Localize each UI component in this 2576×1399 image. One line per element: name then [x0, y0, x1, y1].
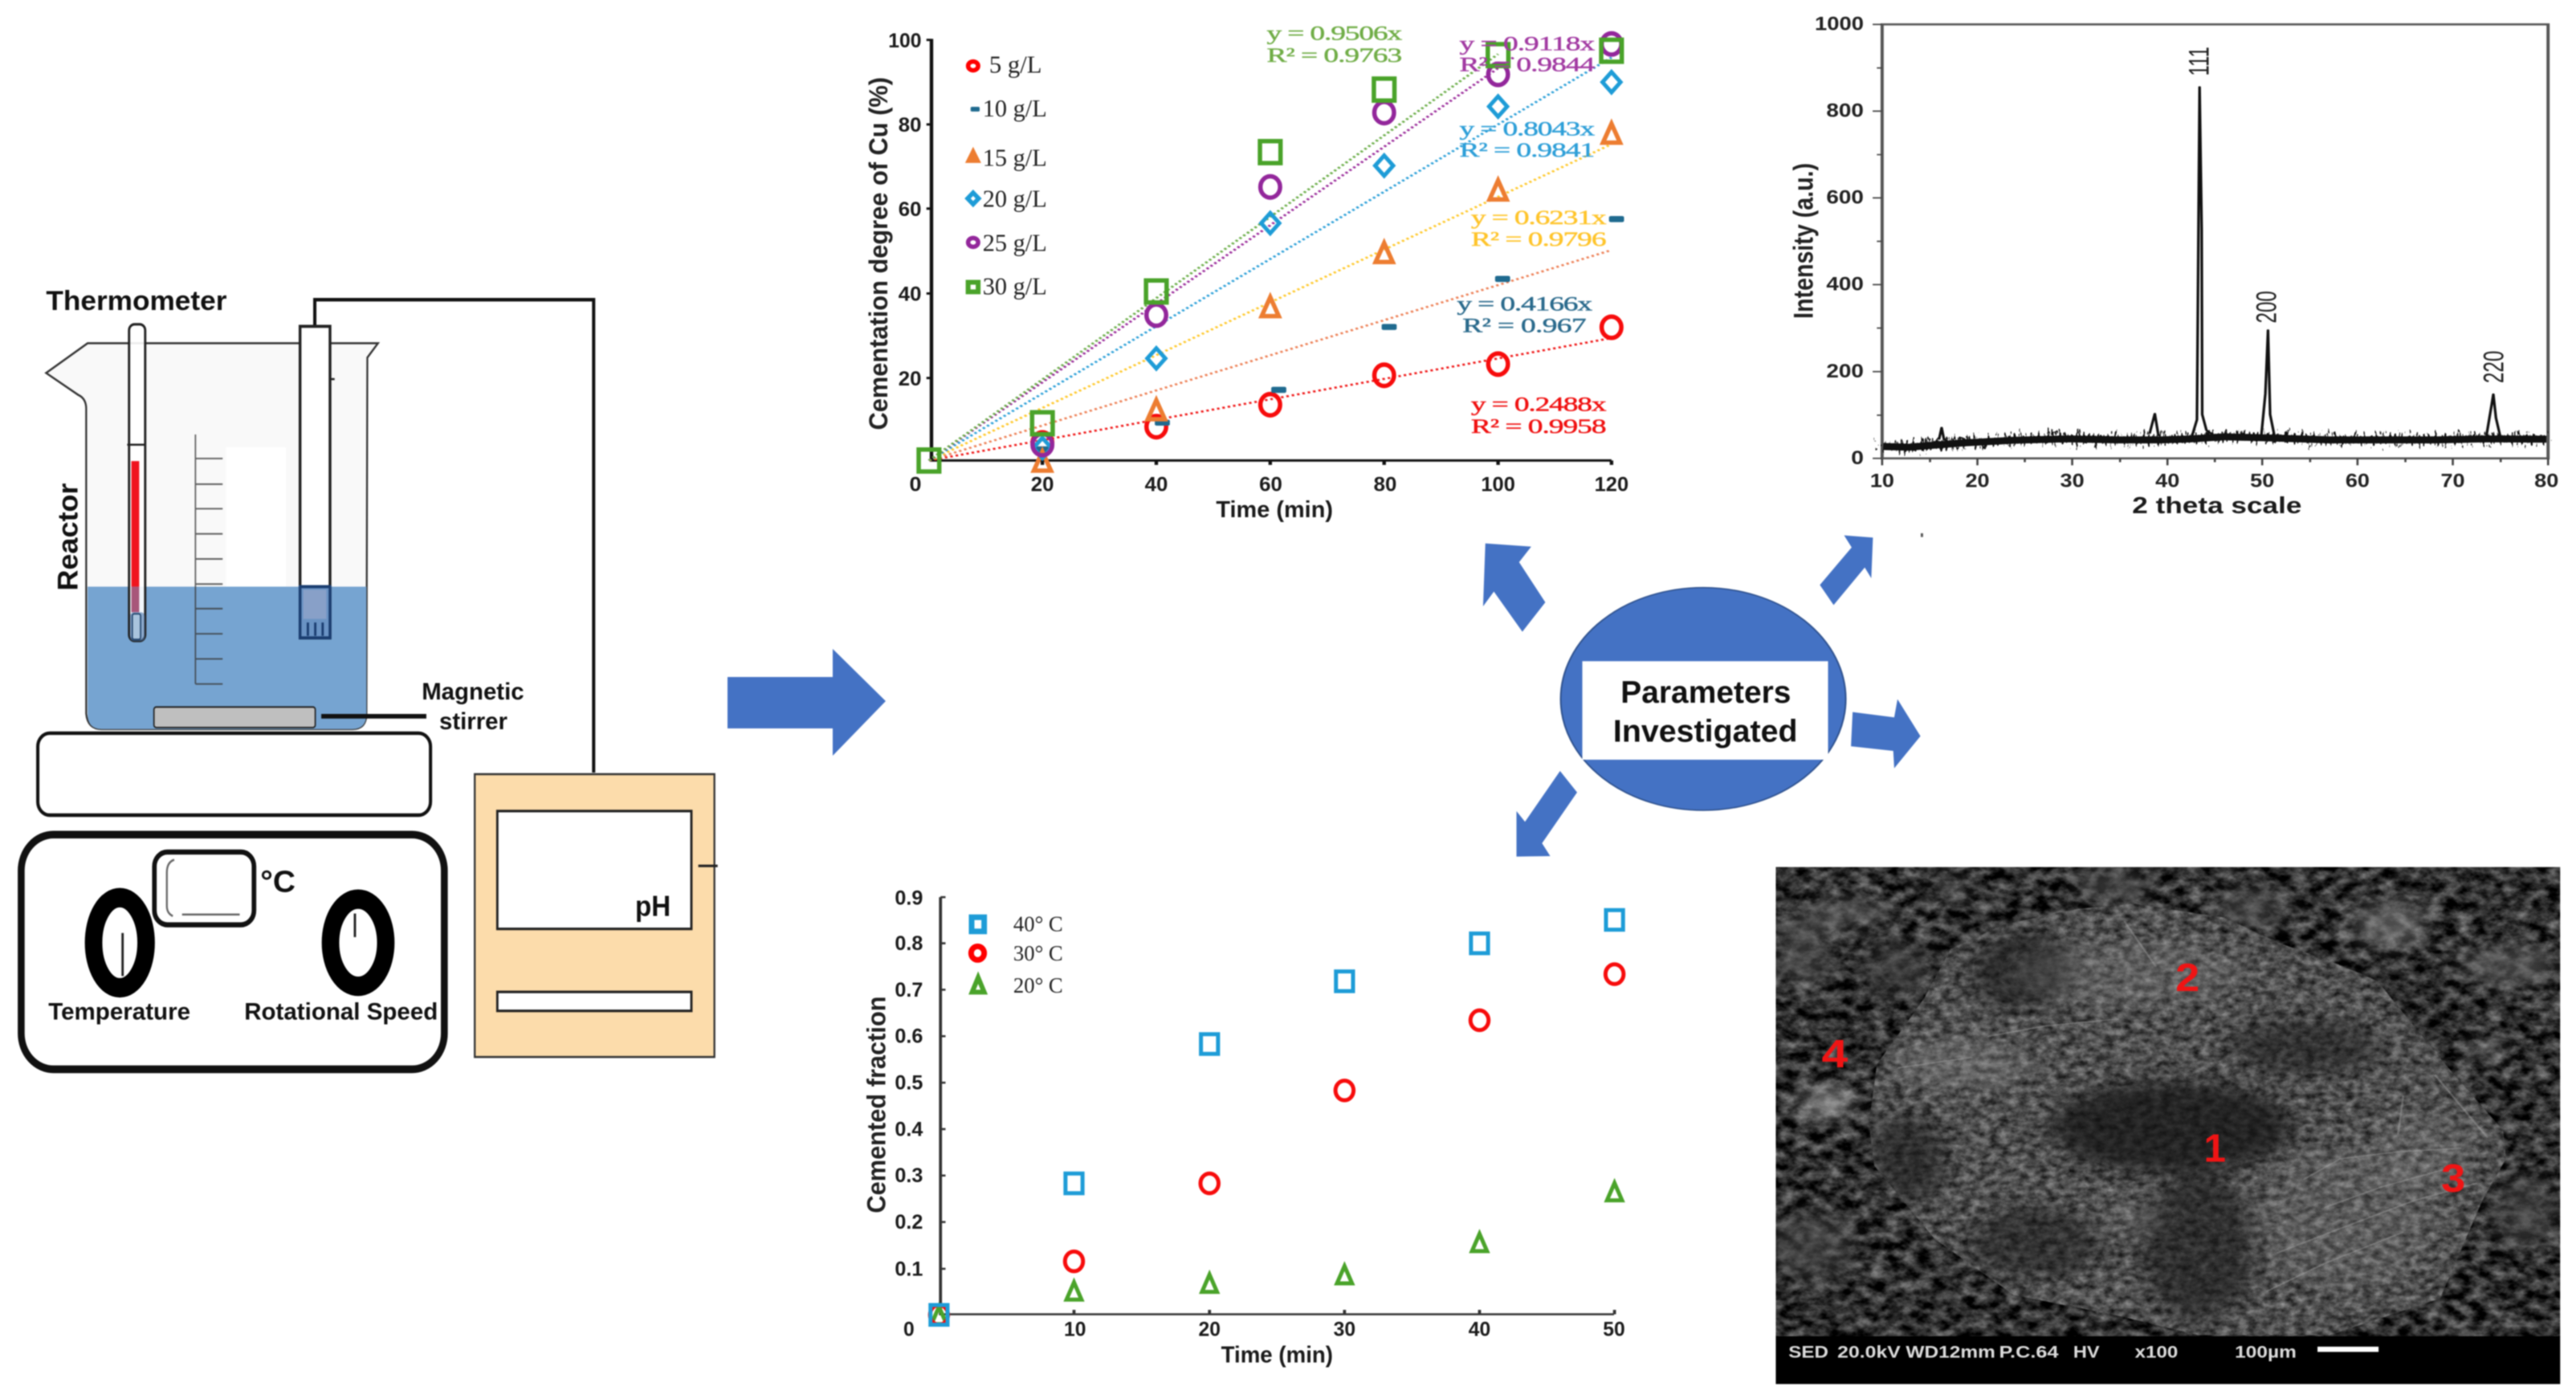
peak label 200: 200 [2252, 291, 2283, 323]
equation: 10 g/L: y = 0.4166x [1457, 292, 1592, 315]
equation: 30 g/L: R² = 0.9763 [1267, 44, 1402, 67]
panel: SEM micrograph [1771, 867, 2560, 1384]
x axis labels: 0 [909, 472, 921, 496]
y axis labels: 60 [899, 198, 921, 221]
x axis labels: 60 [1259, 472, 1282, 496]
series: 30 g/L [919, 39, 1622, 471]
peak label 111: 111 [2184, 47, 2215, 76]
legend: 15 g/L [983, 144, 1047, 171]
hot plate top [38, 733, 430, 815]
series: 20 g/L [1033, 72, 1620, 458]
x axis labels: 70 [2440, 469, 2465, 491]
hot plate control base [21, 834, 444, 1069]
arrow: to SEM image [1851, 700, 1921, 769]
x axis labels: 10 [1870, 469, 1894, 491]
hub label: Parameters [1620, 675, 1791, 710]
x axis labels: 80 [2534, 469, 2558, 491]
x axis title: Time (min) [1221, 1341, 1333, 1368]
SEM info bar [1775, 1336, 2560, 1384]
y axis labels: 0 [1851, 447, 1864, 469]
equation: 30 g/L: y = 0.9506x [1267, 22, 1402, 44]
y axis labels: 0.7 [895, 978, 923, 1001]
x axis labels: 30 [1334, 1318, 1355, 1340]
arrow: to XRD chart [1820, 536, 1873, 605]
x axis labels: 50 [1603, 1318, 1625, 1340]
hub label [1583, 661, 1828, 760]
x axis labels: 60 [2346, 469, 2370, 491]
y axis labels: 0.3 [895, 1164, 923, 1187]
equation: 25 g/L [1460, 32, 1595, 75]
x axis labels [903, 1318, 1625, 1340]
SEM info bar: 100µm [2235, 1343, 2297, 1361]
x axis labels: 20 [1031, 472, 1054, 496]
y axis labels: 600 [1826, 186, 1864, 208]
equation: 10 g/L: R² = 0.967 [1462, 314, 1587, 336]
equation: 5 g/L: R² = 0.9958 [1471, 415, 1607, 437]
legend: 10 g/L [983, 95, 1047, 122]
temperature display [154, 852, 254, 925]
y axis labels: 200 [1826, 360, 1864, 382]
legend: 25 g/L [983, 229, 1047, 256]
series: 20 C [931, 1183, 1622, 1324]
SEM info bar: 20.0kV [1837, 1343, 1901, 1361]
unit label: °C [260, 864, 296, 899]
legend: 40° C [1013, 912, 1063, 936]
series: 40 C [931, 910, 1623, 1325]
equation: 15 g/L: y = 0.6231x [1471, 206, 1607, 229]
hub circle [1561, 588, 1846, 810]
equation: 20 g/L: R² = 0.9841 [1460, 139, 1595, 161]
region labels: 2 [2175, 956, 2199, 1000]
x axis labels: 20 [1965, 469, 1990, 491]
temperature knob [94, 898, 146, 988]
y axis labels: 0.2 [895, 1210, 923, 1234]
series: 30 C [930, 965, 1624, 1325]
x axis labels: 80 [1374, 472, 1396, 496]
central hub and arrows [1483, 533, 1923, 857]
x axis labels [909, 472, 1628, 496]
magnetic stirrer bar [154, 707, 426, 728]
x axis labels: 30 [2060, 469, 2085, 491]
y axis labels: 0.1 [895, 1257, 923, 1280]
equation: 5 g/L: y = 0.2488x [1471, 393, 1607, 415]
SEM info bar: x100 [2135, 1343, 2178, 1361]
equation: 15 g/L [1471, 206, 1607, 251]
SEM info bar: HV [2073, 1343, 2100, 1361]
equation: 25 g/L: R² = 0.9844 [1460, 53, 1595, 75]
x axis title: Time (min) [1216, 496, 1333, 522]
region labels: 1 [2203, 1127, 2226, 1170]
y axis labels: 800 [1826, 100, 1864, 121]
pH meter [475, 774, 718, 1057]
y axis labels: 0.6 [895, 1025, 923, 1047]
legend: 20° C [1013, 973, 1063, 998]
arrow: to cementation chart [1483, 544, 1545, 632]
region labels [1822, 956, 2465, 1201]
equation: 5 g/L [1471, 393, 1607, 437]
rotational speed knob [331, 899, 385, 986]
equation: 10 g/L [1457, 292, 1592, 336]
label: pH: pH [635, 891, 670, 923]
x axis labels: 40 [1469, 1318, 1490, 1340]
x axis labels: 40 [1145, 472, 1168, 496]
x axis title: 2 theta scale [2132, 492, 2301, 518]
chart: cemented fraction versus time [862, 886, 1625, 1368]
y axis labels [888, 29, 922, 390]
peak label 220: 220 [2479, 351, 2510, 383]
y axis title: Cementation degree of Cu (%) [864, 77, 893, 430]
equation: 20 g/L: y = 0.8043x [1460, 117, 1595, 140]
y axis labels [895, 886, 923, 1280]
diffraction baseline noise [1883, 436, 2546, 447]
x axis labels: 120 [1595, 472, 1628, 496]
arrow: to temperature chart [1517, 771, 1577, 857]
legend: 20 g/L [983, 185, 1047, 213]
y axis title: Cemented fraction [862, 996, 891, 1213]
series: 15 g/L [1034, 124, 1620, 471]
x axis labels [1870, 469, 2558, 491]
y axis labels: 0.8 [895, 932, 923, 955]
series: 25 g/L [1033, 33, 1621, 455]
label: rotational speed: Rotational Speed [244, 998, 438, 1025]
region labels: 4 [1822, 1033, 1848, 1076]
y axis labels: 0.5 [895, 1071, 923, 1094]
series: 10 g/L [1036, 216, 1624, 452]
label: magnetic stirrer: Magnetic [422, 679, 524, 704]
y axis labels: 40 [899, 283, 921, 305]
equation: 20 g/L [1460, 117, 1595, 161]
legend: 5 g/L [989, 51, 1042, 79]
legend: 30 g/L [983, 272, 1047, 300]
copper particle [1856, 900, 2519, 1337]
label: temperature: Temperature [48, 998, 190, 1025]
label: magnetic stirrer: stirrer [439, 708, 507, 734]
label: reactor: Reactor [51, 483, 84, 591]
label: magnetic stirrer [422, 679, 524, 734]
thermometer [127, 324, 145, 641]
equation: 15 g/L: R² = 0.9796 [1471, 228, 1607, 251]
series: 5 g/L [1033, 316, 1621, 454]
equation: 30 g/L [1267, 22, 1402, 67]
legend [971, 912, 1063, 998]
x axis labels: 20 [1198, 1318, 1221, 1340]
x axis labels: 100 [1481, 472, 1515, 496]
x axis labels: 40 [2155, 469, 2179, 491]
y axis labels: 20 [899, 367, 921, 390]
SEM info bar: SED [1788, 1343, 1828, 1361]
x axis labels: 10 [1064, 1318, 1086, 1340]
y axis labels: 0.9 [895, 886, 923, 909]
y axis title: Intensity (a.u.) [1789, 163, 1820, 319]
y axis labels [1815, 13, 1864, 469]
trend lines [929, 54, 1612, 460]
equation: 25 g/L: y = 0.9118x [1460, 32, 1595, 55]
hub label: Investigated [1613, 713, 1798, 748]
y axis labels: 0.4 [895, 1117, 923, 1140]
panel: experimental reactor setup [21, 284, 718, 1069]
y axis labels: 80 [899, 113, 921, 137]
chart: X-ray diffraction pattern [1789, 13, 2558, 518]
chart: cementation degree versus time [864, 22, 1628, 522]
SEM info bar: WD12mm [1906, 1343, 1995, 1361]
label: thermometer: Thermometer [46, 284, 227, 316]
SEM background [1771, 867, 2560, 1337]
y axis labels: 1000 [1815, 13, 1864, 35]
diffraction peaks [1939, 87, 2501, 441]
y axis labels: 400 [1826, 273, 1864, 295]
SEM info bar: P.C.64 [1999, 1343, 2059, 1361]
beaker reactor [46, 343, 378, 729]
legend: 30° C [1013, 941, 1063, 965]
x axis labels: 0 [903, 1318, 915, 1340]
arrow: setup to results [728, 649, 886, 756]
legend [965, 51, 1047, 300]
x axis labels: 50 [2250, 469, 2274, 491]
y axis labels: 100 [888, 29, 921, 51]
region labels: 3 [2441, 1157, 2465, 1201]
pH electrode and cable [300, 300, 593, 773]
